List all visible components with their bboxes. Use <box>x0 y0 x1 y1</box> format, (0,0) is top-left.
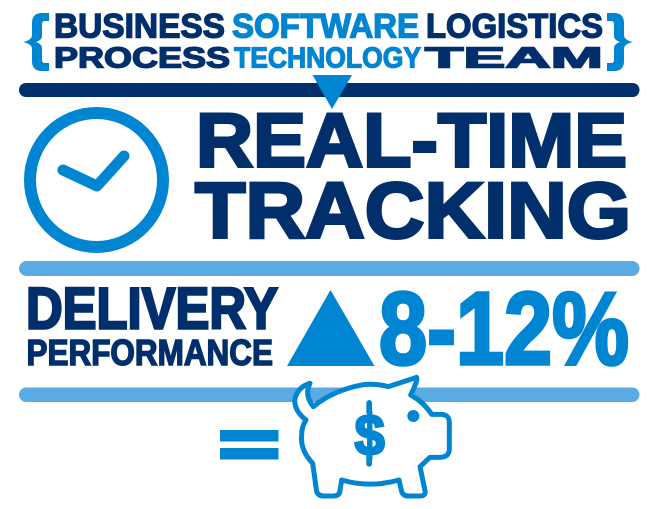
light blue divider bar <box>19 388 640 402</box>
up arrow triangle <box>287 290 374 366</box>
equals sign <box>220 430 278 460</box>
headline: real-time tracking: TRACKING <box>195 166 631 254</box>
down arrow triangle <box>312 75 352 109</box>
light blue divider bar <box>19 261 640 276</box>
header keywords <box>23 7 633 74</box>
headline: real-time tracking: REAL-TIME <box>196 98 627 184</box>
word: business: BUSINESS <box>54 7 225 45</box>
navy divider bar <box>19 83 640 97</box>
label: delivery performance: DELIVERY <box>26 277 278 342</box>
word: software: SOFTWARE <box>232 7 419 45</box>
word: process: PROCESS <box>54 42 230 74</box>
dollar sign: $ <box>355 404 385 468</box>
headline: real-time tracking <box>195 98 631 254</box>
icon: piggy bank <box>295 377 449 496</box>
word: team: TEAM <box>425 42 603 74</box>
pig eye <box>407 410 419 422</box>
label: delivery performance: PERFORMANCE <box>26 332 273 373</box>
label: delivery performance <box>26 277 278 373</box>
word: technology: TECHNOLOGY <box>234 42 421 74</box>
icon: clock <box>30 113 163 247</box>
right brace <box>607 13 633 71</box>
left brace <box>23 13 49 71</box>
word: logistics: LOGISTICS <box>426 7 603 45</box>
